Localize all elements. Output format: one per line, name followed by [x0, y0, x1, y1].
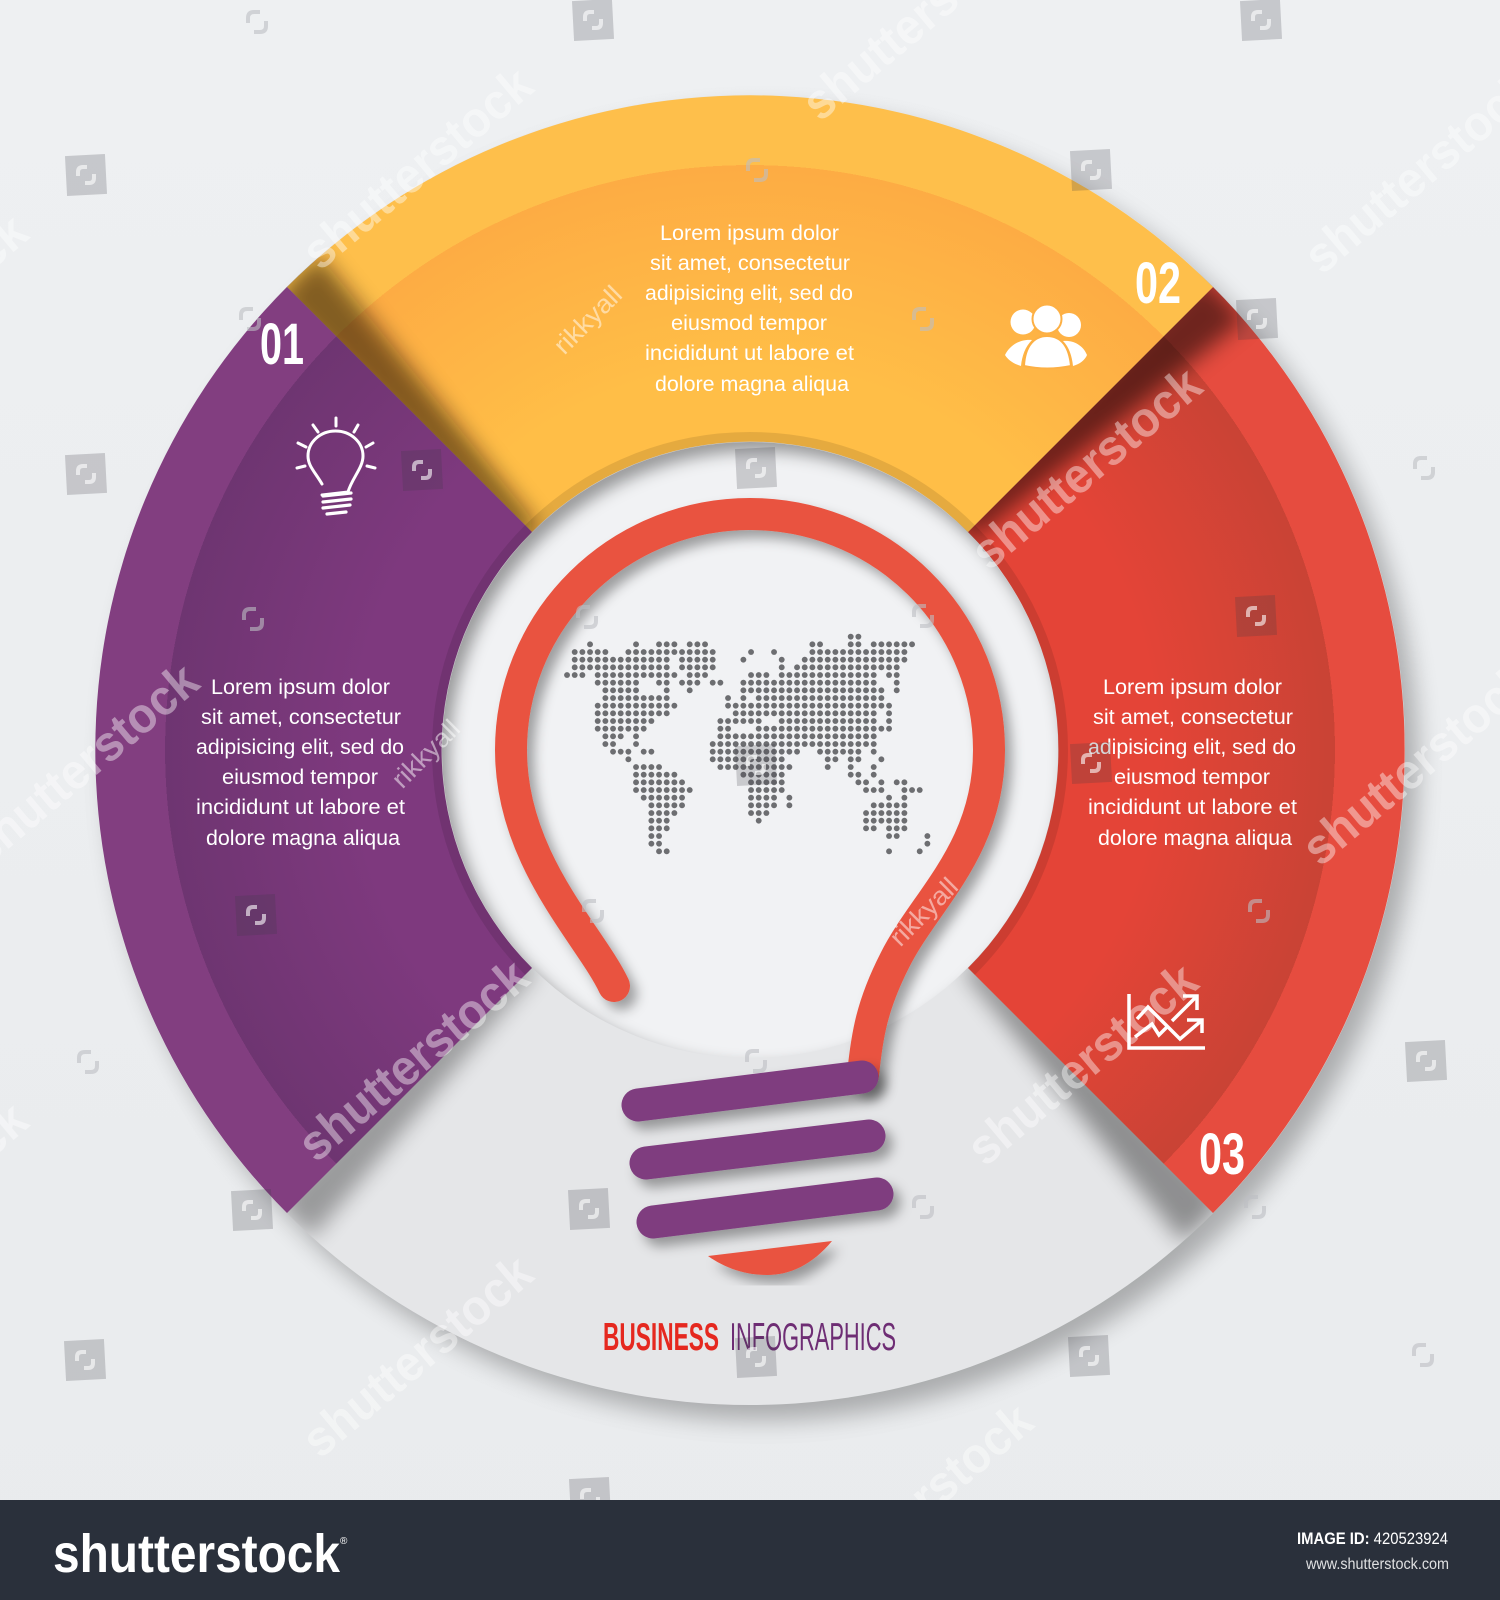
footer image id — [1297, 1529, 1449, 1573]
text block: red: dolore magna aliqua — [1098, 826, 1292, 850]
text block: purple: adipisicing elit, sed do — [196, 735, 404, 759]
text block: yellow — [645, 221, 854, 396]
watermarks: rikkyall — [385, 713, 466, 794]
text block: red: eiusmod tempor — [1114, 765, 1270, 789]
footer image id: www.shutterstock.com — [1305, 1556, 1449, 1573]
text block: red: incididunt ut labore et — [1088, 795, 1297, 819]
bulb base tip — [708, 1241, 832, 1275]
title: business infographics: INFOGRAPHICS — [730, 1316, 896, 1359]
footer image id: IMAGE ID: 420523924 — [1297, 1529, 1448, 1548]
footer logo: ® — [340, 1536, 348, 1547]
text block: yellow: adipisicing elit, sed do — [645, 281, 853, 305]
watermarks: rikkyall — [547, 279, 628, 360]
title: business infographics — [603, 1316, 896, 1359]
text block: yellow: dolore magna aliqua — [655, 372, 849, 396]
text block: purple — [196, 675, 405, 850]
number 01: 01 — [260, 312, 304, 377]
footer logo: shutterstock — [53, 1524, 341, 1584]
footer bar — [0, 1500, 1500, 1600]
text block: purple: dolore magna aliqua — [206, 826, 400, 850]
icon: people — [1005, 304, 1087, 368]
watermarks: rikkyall — [883, 871, 964, 952]
title: business infographics: BUSINESS — [603, 1316, 719, 1359]
text block: purple: Lorem ipsum dolor — [211, 675, 390, 699]
text block: red: Lorem ipsum dolor — [1103, 675, 1282, 699]
text block: purple: sit amet, consectetur — [201, 705, 401, 729]
bulb base bars — [638, 1077, 877, 1222]
panel: circular base with drop shadow — [95, 95, 1418, 1420]
panel: yellow segment 02 — [287, 95, 1245, 538]
text block: red: adipisicing elit, sed do — [1088, 735, 1296, 759]
watermarks: shutterstock — [291, 1244, 543, 1468]
text block: red: sit amet, consectetur — [1093, 705, 1293, 729]
text block: red — [1088, 675, 1297, 850]
panel: centre hole — [437, 437, 1077, 1079]
text block: purple: incididunt ut labore et — [196, 795, 405, 819]
watermarks: shutterstock — [956, 952, 1208, 1176]
panel: red segment 03 — [276, 287, 1405, 1243]
text block: yellow: incididunt ut labore et — [645, 341, 854, 365]
icon: growth chart — [1129, 994, 1205, 1048]
number 02: 02 — [1135, 251, 1181, 316]
panel: purple segment 01 — [95, 255, 538, 1213]
world map dots — [567, 637, 927, 851]
watermarks: shutterstock — [960, 356, 1212, 580]
text block: yellow: Lorem ipsum dolor — [660, 221, 839, 245]
text block: yellow: sit amet, consectetur — [650, 251, 850, 275]
number 03: 03 — [1199, 1122, 1245, 1187]
watermarks: shutterstock — [287, 948, 539, 1172]
watermarks: shutterstock — [291, 56, 543, 280]
text block: purple: eiusmod tempor — [222, 765, 378, 789]
text block: yellow: eiusmod tempor — [671, 311, 827, 335]
lightbulb outline — [511, 514, 989, 1075]
icon: light bulb — [297, 418, 375, 514]
